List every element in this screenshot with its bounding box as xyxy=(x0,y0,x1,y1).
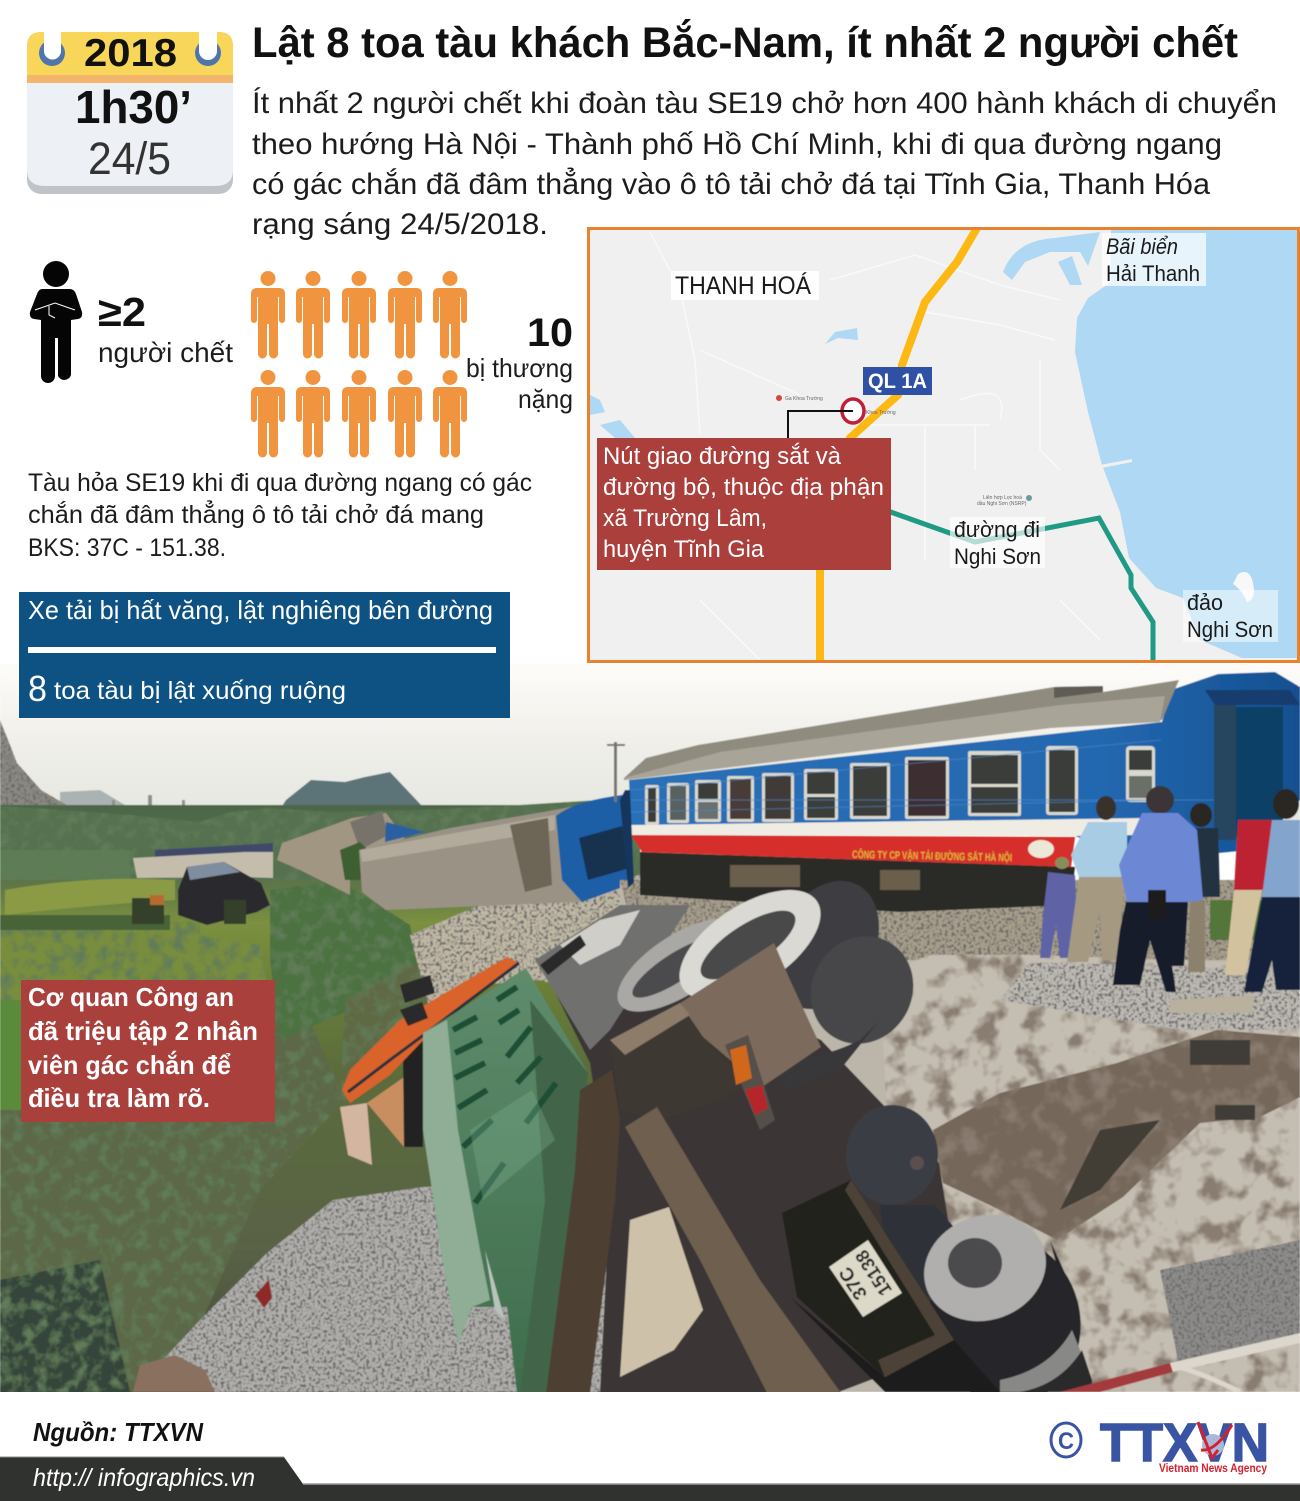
map label: island xyxy=(1183,590,1278,642)
logo: TTXVN: Vietnam News Agency xyxy=(1159,1463,1268,1475)
orange tarp and cloth xyxy=(340,1103,372,1165)
intro paragraph xyxy=(252,87,1277,241)
right ground xyxy=(620,880,1300,1392)
callout: police investigation: viên gác chắn để xyxy=(28,1050,231,1080)
calendar date badge: 1h30’ xyxy=(75,81,192,133)
callout: blue key facts: toa tàu bị lật xuống ruộng xyxy=(54,677,346,705)
red safety rail xyxy=(1060,1363,1173,1392)
workers xyxy=(1040,786,1300,992)
description text: Tàu hỏa SE19 khi đi qua đường ngang có gác xyxy=(28,469,532,497)
map: small place labels: Liên hợp Lọc hoá xyxy=(983,495,1022,501)
stat: seriously injured: bị thương xyxy=(466,353,573,383)
map label: road: đường đi xyxy=(954,517,1040,542)
intro paragraph: rạng sáng 24/5/2018. xyxy=(252,208,548,241)
map: road to Nghi Son xyxy=(885,510,1153,662)
callout: police investigation: đã triệu tập 2 nhân xyxy=(28,1016,258,1046)
bottom tyre xyxy=(1050,1240,1064,1272)
callout: blue key facts: 8 xyxy=(28,668,47,709)
source credit: Nguồn: TTXVN xyxy=(33,1417,204,1447)
ground xyxy=(0,805,640,1395)
far carriages xyxy=(154,842,274,857)
brown beam xyxy=(625,1107,841,1393)
callout: police investigation xyxy=(21,980,275,1122)
truck: load gate xyxy=(535,905,690,1050)
icon: mourning person xyxy=(30,261,82,383)
photo: overturned truck and derailed train xyxy=(0,664,1300,1422)
title: Lật 8 toa tàu khách Bắc-Nam, ít nhất 2 người chết xyxy=(252,18,1238,67)
embankment xyxy=(410,874,641,1004)
calendar date badge: 2018 xyxy=(84,32,177,75)
calendar date badge xyxy=(27,32,233,194)
stat: deaths: người chết xyxy=(98,337,233,368)
map label: beach xyxy=(1102,233,1206,286)
map label: beach: Hải Thanh xyxy=(1106,261,1200,286)
footer bar xyxy=(0,1457,1300,1501)
map callout: crossing location xyxy=(597,438,891,570)
map: small place labels: Ga Khoa Trường xyxy=(785,396,823,402)
truck: axle and hub xyxy=(846,1105,938,1205)
logo: TTXVN: TTXVN xyxy=(1100,1413,1269,1473)
map callout: crossing location: xã Trường Lâm, xyxy=(603,505,767,532)
green tailgate xyxy=(423,968,588,1393)
map: highway QL 1A xyxy=(820,228,977,662)
description text xyxy=(28,469,532,562)
photo: overturned truck and derailed train: 15138 xyxy=(852,1246,897,1299)
second overturned car xyxy=(277,813,405,895)
map callout: crossing location: Nút giao đường sắt và xyxy=(603,443,842,470)
map: lakes xyxy=(825,328,858,344)
map: small place labels: Khoa Trường xyxy=(866,410,896,416)
licence plate xyxy=(829,1240,902,1317)
first overturned car xyxy=(358,806,581,910)
truck: black frame xyxy=(782,1180,934,1378)
calendar date badge: 24/5 xyxy=(88,133,171,184)
stat: deaths: ≥2 xyxy=(98,289,146,335)
stat: seriously injured: nặng xyxy=(518,384,573,414)
stat: seriously injured: 10 xyxy=(527,311,573,355)
description text: chắn đã đâm thẳng ô tô tải chở đá mang xyxy=(28,499,484,529)
map callout: crossing location: huyện Tĩnh Gia xyxy=(603,536,765,563)
logo: TTXVN: C xyxy=(1058,1428,1074,1455)
map label: beach: Bãi biển xyxy=(1106,234,1178,259)
truck: tyres xyxy=(784,880,880,1010)
map label: province: THANH HOÁ xyxy=(675,271,811,300)
panel: location map xyxy=(588,228,1300,662)
callout: blue key facts: Xe tải bị hất văng, lật nghiêng bên đường xyxy=(28,595,493,625)
map label: road xyxy=(950,517,1045,569)
truck: chassis xyxy=(557,994,948,1392)
windows xyxy=(645,746,1155,825)
photo: overturned truck and derailed train: 37C xyxy=(835,1262,872,1303)
gravel xyxy=(164,1186,607,1392)
map: small place labels: dầu Nghi Sơn (NSRP) xyxy=(977,501,1027,507)
stat: seriously injured xyxy=(251,271,573,458)
map callout: crossing location: đường bộ, thuộc địa phận xyxy=(603,474,884,501)
description text: BKS: 37C - 151.38. xyxy=(28,534,226,562)
left rock xyxy=(60,790,125,806)
callout: blue key facts xyxy=(19,592,510,718)
intro paragraph: theo hướng Hà Nội - Thành phố Hồ Chí Minh, khi đi qua đường ngang xyxy=(252,128,1222,161)
map: small place labels xyxy=(776,395,1032,507)
truck: tail lights xyxy=(725,1035,775,1130)
photo: overturned truck and derailed train: CÔNG TY CP VẬN TẢI ĐƯỜNG SẮT HÀ NỘI xyxy=(852,848,1012,864)
callout: police investigation: Cơ quan Công an xyxy=(28,982,234,1012)
map label: road: Nghi Sơn xyxy=(954,544,1041,569)
intro paragraph: Ít nhất 2 người chết khi đoàn tàu SE19 chở hơn 400 hành khách di chuyển xyxy=(252,87,1277,120)
icon: ten orange people xyxy=(251,271,467,458)
stat: deaths xyxy=(30,261,233,383)
footer bar: http:// infographics.vn xyxy=(33,1464,255,1492)
map: sea xyxy=(1075,228,1300,658)
mound dark patch xyxy=(933,1030,1300,1240)
intro paragraph: có gác chắn đã đâm thẳng vào ô tô tải chở đá tại Tĩnh Gia, Thanh Hóa xyxy=(252,167,1210,201)
map label: island: đảo xyxy=(1187,590,1223,615)
map marker: crossing point xyxy=(788,399,864,440)
callout: police investigation: điều tra làm rõ. xyxy=(28,1083,210,1113)
map: minor roads xyxy=(650,232,1100,660)
map label: QL 1A: QL 1A xyxy=(868,370,927,393)
map label: island: Nghi Sơn xyxy=(1187,617,1273,642)
main blue carriage xyxy=(640,852,1075,912)
